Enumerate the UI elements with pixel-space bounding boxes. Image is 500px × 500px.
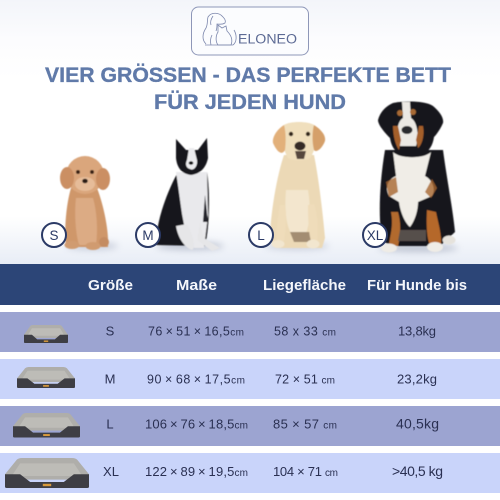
size badge L <box>249 223 273 247</box>
row M: 90 × 68 × 17,5cm <box>147 372 245 386</box>
table header: Für Hunde bis <box>367 278 467 294</box>
table header: Größe <box>88 278 133 294</box>
row S: 13,8kg <box>398 324 436 338</box>
dog M: border collie <box>156 138 224 251</box>
row L: 106 × 76 × 18,5cm <box>145 416 248 432</box>
bed L <box>13 413 80 438</box>
row XL: >40,5 kg <box>392 463 443 479</box>
row S <box>0 312 500 352</box>
dog XL: bernese mountain dog <box>378 101 458 253</box>
size badge S <box>42 223 66 247</box>
title: FÜR JEDEN HUND <box>154 91 346 114</box>
title: VIER GRÖSSEN - DAS PERFEKTE BETT <box>45 64 451 87</box>
row L: L <box>106 416 114 432</box>
size badge L: L <box>257 228 265 243</box>
row S: S <box>106 324 115 338</box>
row XL: 104 × 71 cm <box>273 464 338 479</box>
row M: 72 × 51 cm <box>275 372 335 386</box>
bed S <box>24 325 68 343</box>
row M <box>0 359 500 399</box>
row XL: 122 × 89 × 19,5cm <box>145 464 248 479</box>
size badge S: S <box>49 228 59 243</box>
title <box>45 64 451 114</box>
logo <box>192 7 308 55</box>
row L <box>0 406 500 446</box>
row L: 40,5kg <box>396 416 439 432</box>
dog L: labrador <box>265 122 329 250</box>
table header: Liegefläche <box>263 278 346 294</box>
bed M <box>17 367 75 388</box>
row S: 58 x 33 cm <box>274 324 336 338</box>
size badge M <box>136 223 160 247</box>
row M: M <box>105 372 115 386</box>
row M: 23,2kg <box>397 372 437 386</box>
table header: Maße <box>176 278 217 294</box>
dog S: poodle <box>60 156 118 250</box>
size badge XL <box>363 223 387 247</box>
row XL: XL <box>103 464 119 479</box>
table header <box>0 264 500 305</box>
size badge M: M <box>142 228 154 243</box>
row XL <box>0 453 500 493</box>
row S: 76 × 51 × 16,5cm <box>148 324 244 338</box>
row L: 85 × 57 cm <box>273 416 337 432</box>
logo: ELONEO <box>238 32 297 46</box>
bed XL <box>5 458 89 488</box>
size badge XL: XL <box>367 228 384 243</box>
